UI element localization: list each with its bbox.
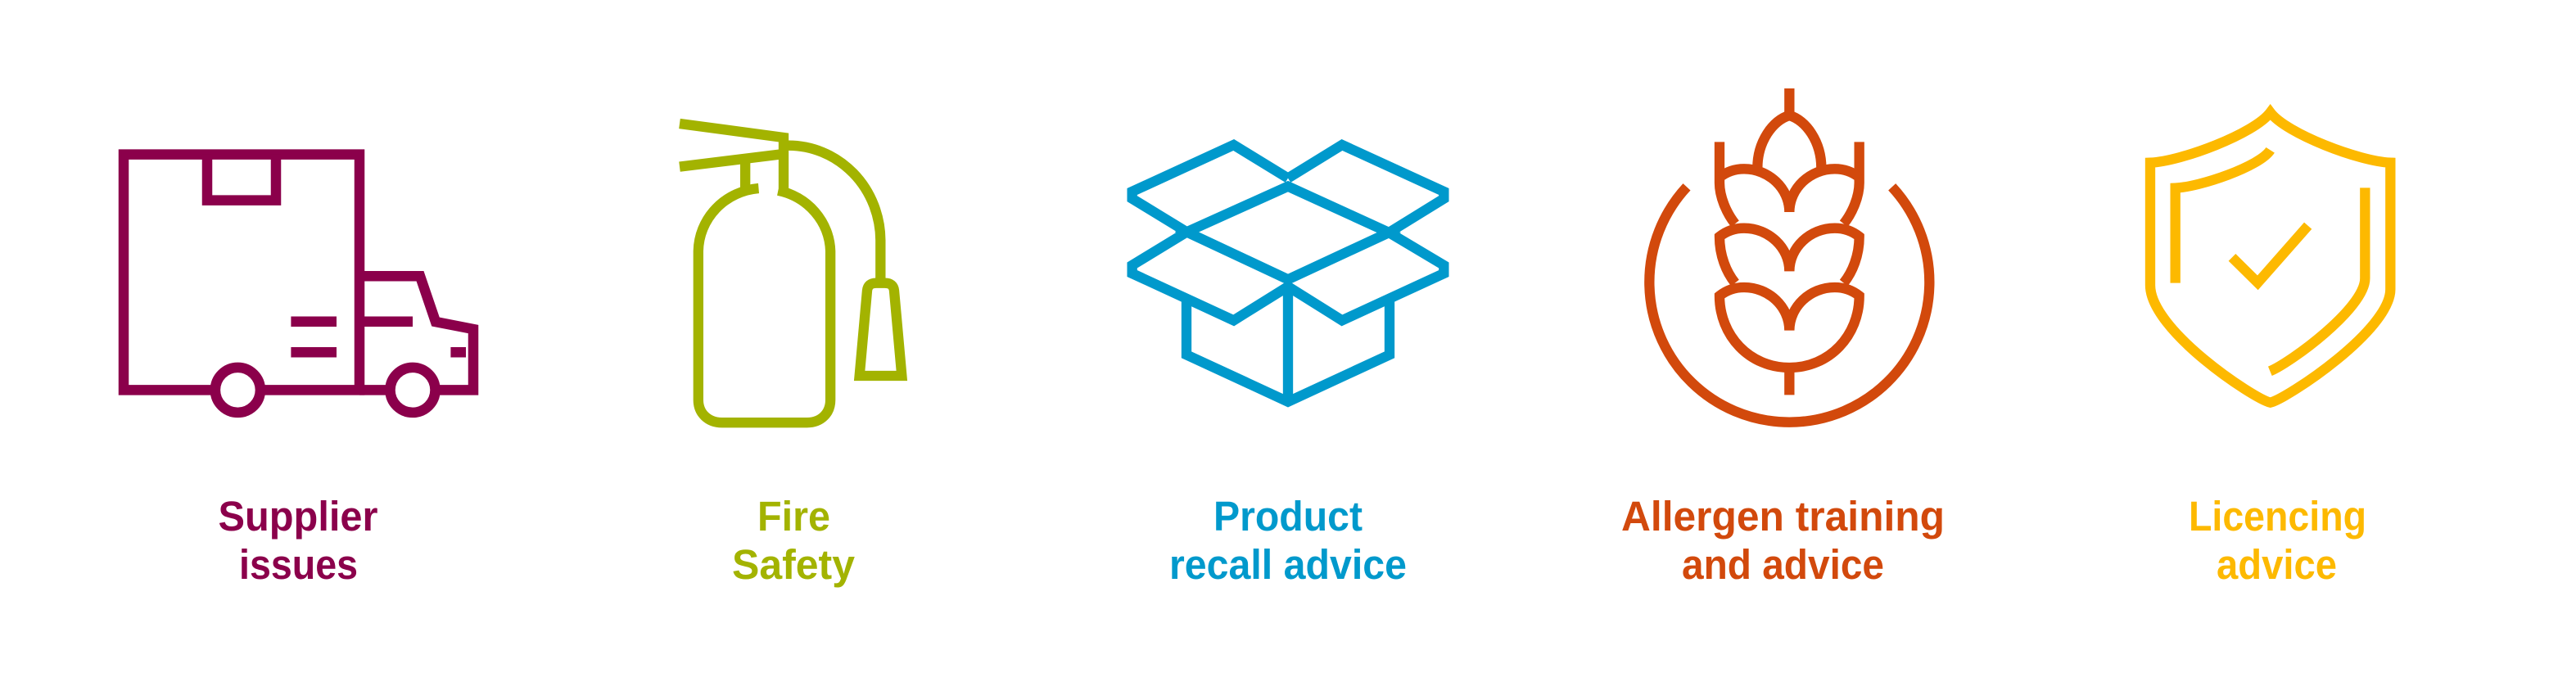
label: allergen training and advice [1621,493,1945,588]
label: fire safety: Safety [732,541,856,588]
panel: fire safety [680,124,902,588]
icon: wheat ear in ring [1649,88,1929,422]
panel: supplier issues [124,155,473,588]
icon: shield with tick [2150,112,2390,403]
label: fire safety [732,493,856,588]
icon: open box [1132,145,1444,402]
label: product recall advice: recall advice [1169,541,1407,588]
label: allergen training and advice: and advice [1682,541,1884,588]
label: product recall advice: Product [1213,493,1363,540]
icon: delivery truck [124,155,473,413]
label: allergen training and advice: Allergen training [1621,493,1945,540]
label: product recall advice [1169,493,1407,588]
panel: allergen training and advice [1621,88,1945,588]
panel: product recall advice [1132,145,1444,588]
label: licencing advice: Licencing [2189,493,2366,540]
label: licencing advice: advice [2217,541,2337,588]
panel: licencing advice [2150,112,2390,588]
label: supplier issues [218,493,378,588]
label: supplier issues: issues [239,541,358,588]
label: fire safety: Fire [757,493,830,540]
label: licencing advice [2189,493,2366,588]
icon: fire extinguisher [680,124,902,422]
label: supplier issues: Supplier [218,493,378,540]
